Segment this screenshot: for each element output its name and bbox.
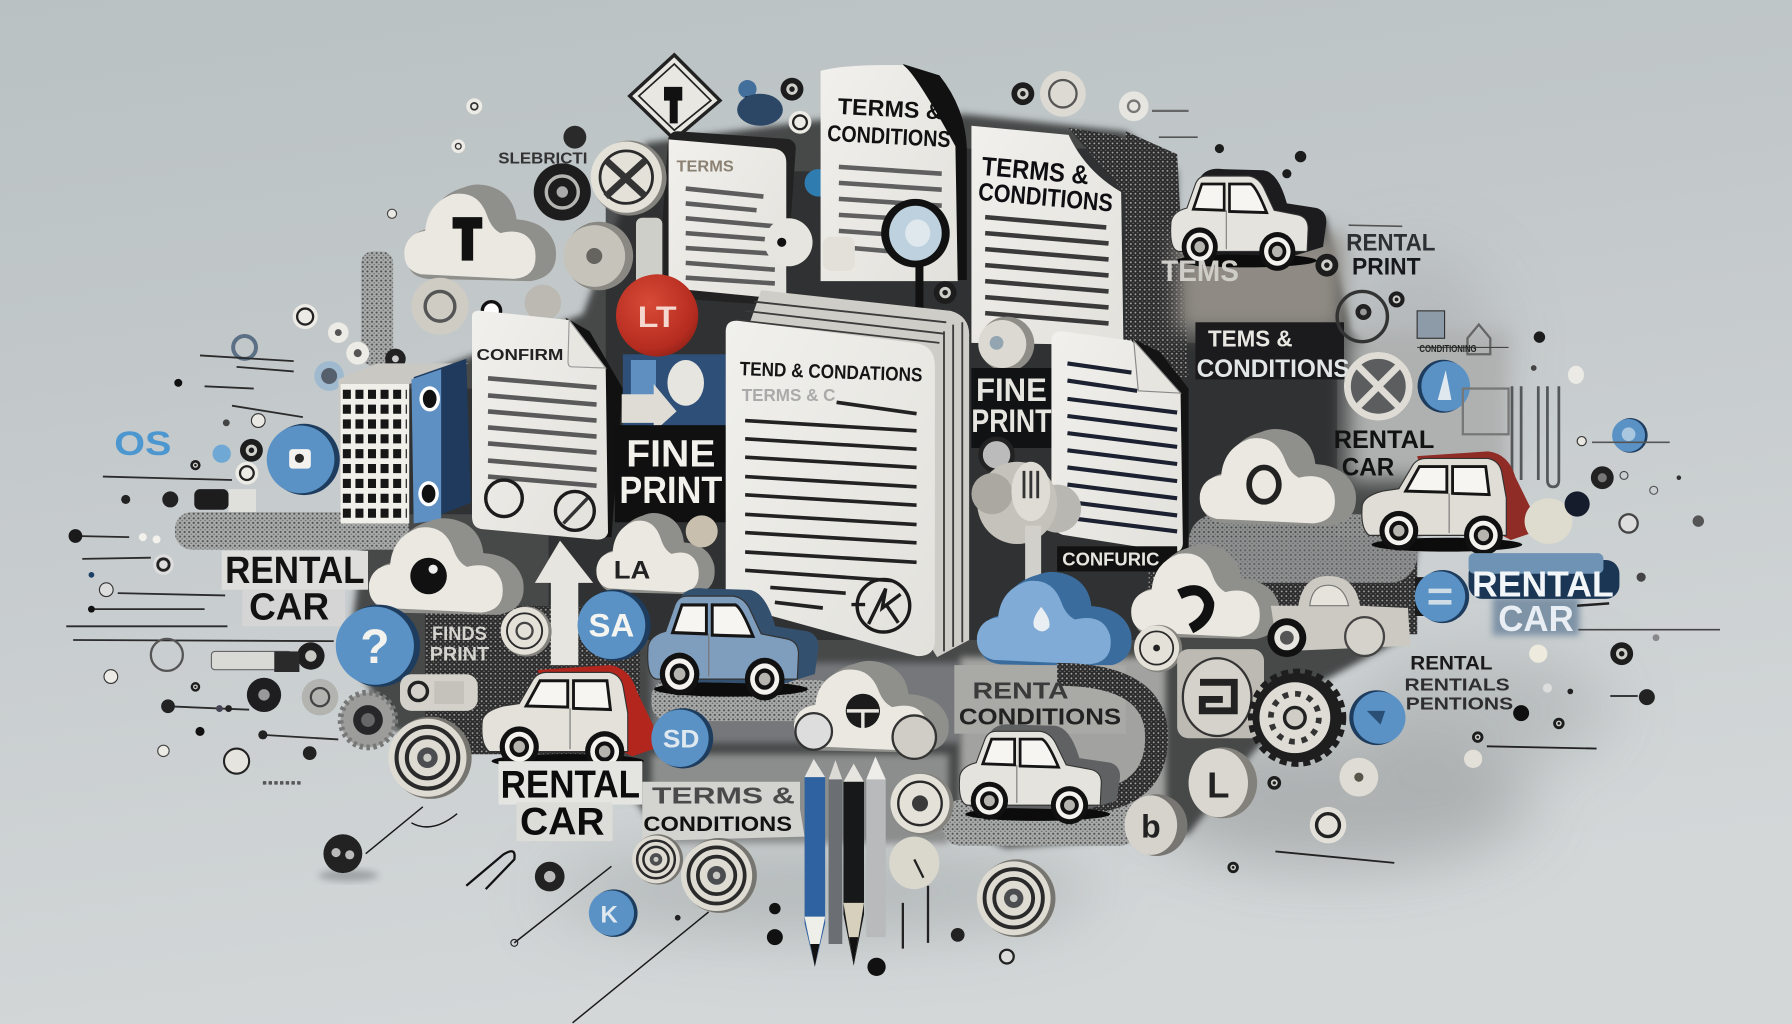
- black panel: fine print: FINE: [626, 432, 715, 474]
- stippled grey pill: [175, 512, 409, 550]
- label: terms and conditions white: TEMS &: [1208, 325, 1293, 351]
- gear: [341, 693, 395, 747]
- black panel: fine print: PRINT: [619, 469, 722, 511]
- left scatter: rings, dots and lines: [66, 336, 338, 783]
- car: white bottom right: [959, 724, 1120, 824]
- label: rental car blue: [1469, 553, 1619, 639]
- blue badge: K: [589, 889, 638, 937]
- blue badge: K: K: [600, 901, 618, 928]
- label: rental car blue: RENTAL: [1472, 564, 1614, 605]
- cloud: eye icon: [369, 518, 524, 615]
- document: striped right sheet: [1051, 331, 1189, 553]
- discs near pencils: [889, 773, 1014, 963]
- heading: terms and conditions: TEND & CONDATIONS: [739, 358, 923, 386]
- faded subheading: TERMS & C: [742, 385, 835, 405]
- label: terms and conditions white: CONDITIONS: [1197, 355, 1350, 383]
- blue badge: question mark: [336, 605, 420, 687]
- knob above fine print panel: [978, 317, 1034, 371]
- small widgets right: [1417, 311, 1509, 434]
- label: rental conditions with chain: RENTA: [973, 677, 1069, 703]
- document: terms and conditions right: [971, 126, 1149, 345]
- car: black roof top right: [1171, 169, 1326, 271]
- red badge: LT: [638, 301, 677, 334]
- car: blue: [648, 588, 818, 700]
- blue badge: top right: [1418, 360, 1470, 413]
- label: rental print: PRINT: [1352, 253, 1421, 280]
- cloud: LA: LA: [614, 556, 650, 584]
- icon: steering wheel: [1344, 352, 1413, 421]
- blue badge: search: [267, 424, 340, 495]
- label: rental car right: CAR: [1342, 453, 1394, 481]
- label: rental small stack: RENTAL: [1410, 653, 1493, 675]
- heading: terms and conditions: [827, 92, 953, 152]
- pencils: [805, 757, 886, 976]
- cloud: question: [1131, 544, 1280, 639]
- black panel: fine print right: [971, 368, 1054, 471]
- label: rental car bottom: CAR: [520, 800, 605, 843]
- heading: confirm: CONFIRM: [477, 347, 563, 364]
- heading: terms and conditions: CONDITIONS: [827, 120, 951, 152]
- label: terms and conditions bottom: [642, 782, 805, 841]
- ivory blob ornament: [1525, 491, 1590, 544]
- heading: terms and conditions: TERMS &: [837, 93, 944, 124]
- label: OS: OS: [114, 425, 171, 463]
- blue badge: right of cluster: [1415, 570, 1469, 623]
- label: rental car left: CAR: [249, 585, 329, 627]
- car: red roof right: [1362, 451, 1531, 555]
- label: fine print right: FINE: [976, 372, 1047, 408]
- label: rental small stack: [1405, 653, 1513, 714]
- lower right small discs: [1227, 642, 1655, 873]
- large gear: [1253, 673, 1342, 762]
- label: rental car right: RENTAL: [1334, 426, 1434, 454]
- icon: white eyeball: [765, 218, 855, 271]
- icon: vertical bars: [1512, 386, 1559, 487]
- label: fine print right: PRINT: [971, 403, 1052, 439]
- cloud: LA: [596, 513, 718, 594]
- label: rental conditions with chain: CONDITIONS: [959, 704, 1121, 730]
- blue cloud: [977, 572, 1132, 667]
- label: rental conditions with chain: [954, 665, 1157, 802]
- stippled band under white car: [943, 800, 1137, 846]
- label: rental print: [1346, 229, 1435, 280]
- blue scraps and arrow behind red badge: [622, 354, 726, 440]
- label: fine print small: [430, 623, 489, 666]
- cloud on wheels: [794, 661, 949, 759]
- heading: terms and conditions: [977, 151, 1116, 218]
- blue badge: SA: [578, 589, 651, 661]
- label: confirm strip: [1057, 546, 1177, 571]
- soft cast shadows: [549, 251, 1611, 937]
- heading: terms and conditions: TERMS &: [980, 151, 1090, 190]
- icon: rejected stamp: [851, 579, 910, 632]
- rings discs bottom: [632, 834, 1055, 937]
- label: rental small stack: PENTIONS: [1406, 694, 1513, 714]
- blue badge: SD: SD: [663, 725, 699, 753]
- rings disc left: [388, 717, 472, 799]
- label: rental car right: [1334, 426, 1434, 481]
- disc: b: [1125, 794, 1187, 856]
- label: rental car bottom: RENTAL: [501, 764, 640, 807]
- blue badge: question mark: ?: [360, 621, 390, 674]
- label: rental car bottom: [498, 761, 642, 843]
- cloud: T icon: [404, 184, 556, 281]
- main contract stack: [726, 290, 969, 657]
- blue badge: SD: [651, 708, 713, 768]
- capsule switch: [400, 674, 478, 711]
- small label: top left scrap: SLEBRICTI: [498, 150, 587, 167]
- faded label: terms: TEMS: [1161, 255, 1239, 288]
- document: terms top centre: [821, 64, 967, 281]
- label: terms and conditions bottom: CONDITIONS: [643, 811, 792, 836]
- label: terms and conditions bottom: TERMS &: [652, 782, 795, 808]
- blue badge: right gear: [1349, 690, 1405, 745]
- faded scrap heading: TERMS: [677, 158, 734, 175]
- right scatter: rings, dots and lines: [1159, 137, 1720, 641]
- stippled lower band: [651, 680, 834, 721]
- label: rental small stack: RENTIALS: [1405, 674, 1510, 694]
- disc: L: [1189, 747, 1257, 818]
- label: fine print right: [971, 372, 1052, 439]
- heading: terms and conditions: CONDITIONS: [977, 178, 1114, 218]
- car: red roof: [482, 665, 653, 772]
- disc: L: L: [1207, 765, 1229, 806]
- black panel: fine print: [615, 425, 729, 522]
- label: rental car blue: CAR: [1498, 598, 1574, 639]
- label: fine print small: PRINT: [430, 644, 489, 666]
- knob near arrow: [501, 606, 552, 657]
- central dark collage base: [349, 114, 1509, 848]
- icon: hook ring: [1315, 254, 1405, 342]
- document: confirm: [472, 311, 623, 540]
- icon: blue pin: [737, 80, 783, 126]
- icon: up arrow: [535, 541, 593, 665]
- small controls row: [211, 642, 338, 715]
- small widgets right: CONDITIONING: [1419, 344, 1477, 355]
- stippled band right: [1189, 514, 1417, 583]
- disc with keyhole: [1134, 625, 1182, 672]
- gears and knobs beside top cloud: [293, 141, 667, 391]
- label: confirm strip: CONFURIC: [1062, 549, 1159, 570]
- label: rental car left: RENTAL: [225, 549, 365, 591]
- building block: [338, 363, 469, 523]
- car: beige: [1267, 576, 1410, 657]
- blue badge: SA: SA: [589, 608, 634, 644]
- small top knobs: [387, 71, 1189, 218]
- stippled column: [361, 251, 393, 366]
- label: rental car left: [222, 549, 368, 627]
- icon: wrench cloud: [971, 462, 1081, 583]
- label: terms and conditions white: [1195, 322, 1350, 383]
- label: fine print small: FINDS: [432, 623, 487, 645]
- document: left rear sheet: [657, 131, 796, 306]
- lower left shapes: keys and lines: [319, 807, 783, 1023]
- disc: b: b: [1141, 809, 1161, 845]
- blue binder: [411, 359, 471, 523]
- square disc: [1177, 649, 1264, 738]
- cloud: O: [1200, 429, 1356, 526]
- red badge: [616, 274, 698, 357]
- label: rental print: RENTAL: [1346, 229, 1435, 256]
- icon: warning diamond sign: [630, 55, 720, 139]
- icon: magnifying glass: [881, 199, 957, 309]
